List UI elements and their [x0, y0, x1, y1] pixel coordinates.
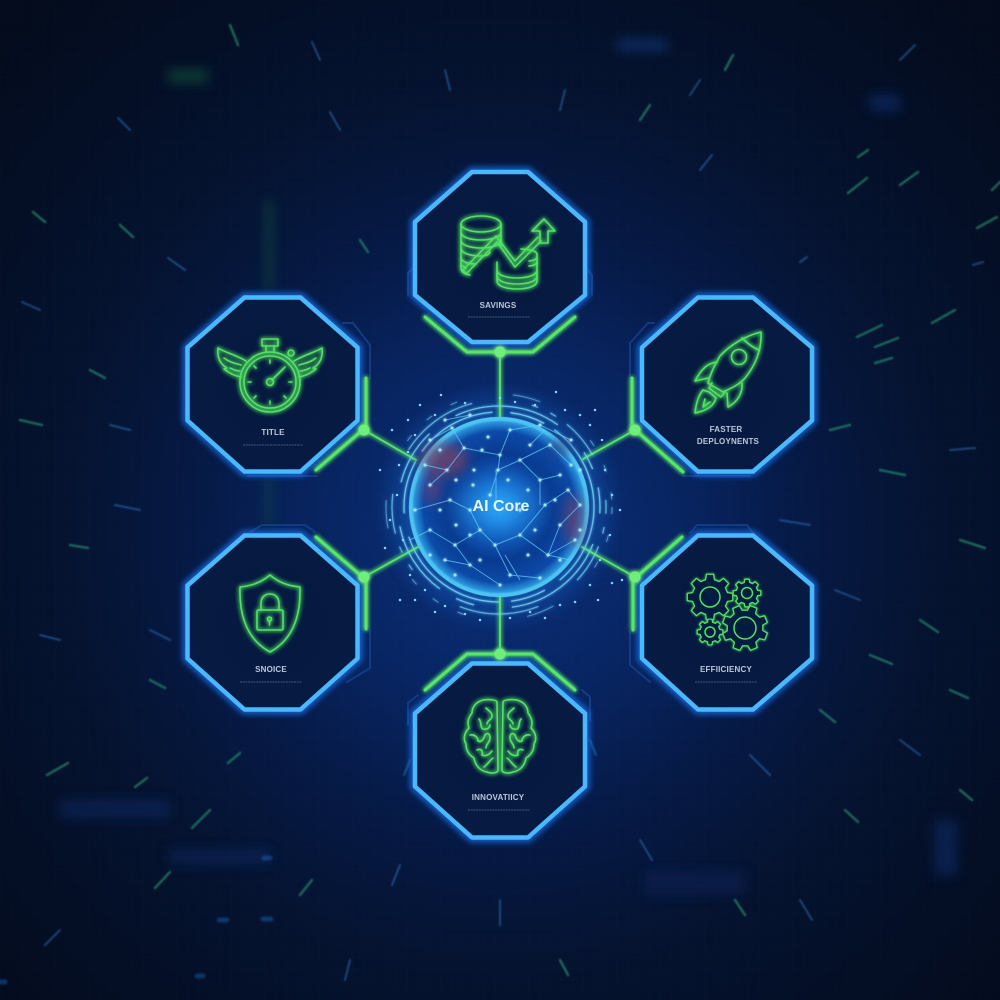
- connector: upper left: [316, 378, 416, 470]
- connector: upper right: [583, 378, 683, 472]
- icon: rocket: [695, 332, 761, 413]
- icon: brain: [464, 700, 536, 773]
- panel: title stopwatch: [188, 298, 358, 472]
- efficiency caption line: [695, 681, 757, 683]
- faster deployments label: FASTER: [710, 425, 742, 434]
- sphere outer glow: [374, 382, 624, 632]
- efficiency label: EFFIICIENCY: [700, 665, 752, 674]
- background haze blocks: [60, 40, 957, 895]
- panel: faster deployments: [642, 298, 812, 472]
- globe rim glow: [411, 419, 587, 595]
- connector: top: [425, 317, 575, 418]
- faster deployments label line 2: DEPLOYNENTS: [697, 437, 760, 446]
- innovation label: INNOVATIICY: [472, 793, 525, 802]
- innovation frame: [415, 664, 585, 838]
- connector: bottom: [425, 592, 575, 690]
- title frame: [188, 298, 358, 472]
- efficiency frame: [642, 536, 812, 710]
- warm land patches: [420, 438, 584, 546]
- faster deployments frame: [642, 298, 812, 472]
- icon: coins and growth arrow: [461, 216, 555, 289]
- orbit rings: [386, 394, 612, 620]
- savings caption line: [468, 316, 530, 318]
- AI core sphere: [380, 392, 622, 620]
- panel: savings: [415, 172, 585, 342]
- panel: efficiency gears: [642, 536, 812, 710]
- AI core label: AI Core: [473, 498, 530, 515]
- plexus network lines: [410, 415, 580, 585]
- title label: TITLE: [261, 428, 285, 437]
- outer scattered particles: [380, 392, 622, 620]
- panel: snoice shield: [188, 536, 358, 710]
- snoice frame: [188, 536, 358, 710]
- savings label: SAVINGS: [480, 301, 517, 310]
- core light: [461, 479, 537, 535]
- plexus network nodes: [415, 415, 580, 585]
- icon: winged stopwatch: [218, 339, 322, 412]
- panel: back frames behind panels: [248, 263, 753, 725]
- snoice label: SNOICE: [255, 665, 287, 674]
- savings frame: [415, 172, 585, 342]
- snoice caption line: [240, 681, 302, 683]
- innovation caption line: [468, 809, 530, 811]
- panel: innovation brain: [415, 664, 585, 838]
- globe body: [409, 417, 589, 597]
- title caption line: [243, 444, 303, 446]
- icon: gears: [687, 574, 775, 658]
- icon: shield and padlock: [240, 575, 300, 652]
- connector: lower left: [316, 537, 418, 629]
- connector: lower right: [582, 537, 682, 630]
